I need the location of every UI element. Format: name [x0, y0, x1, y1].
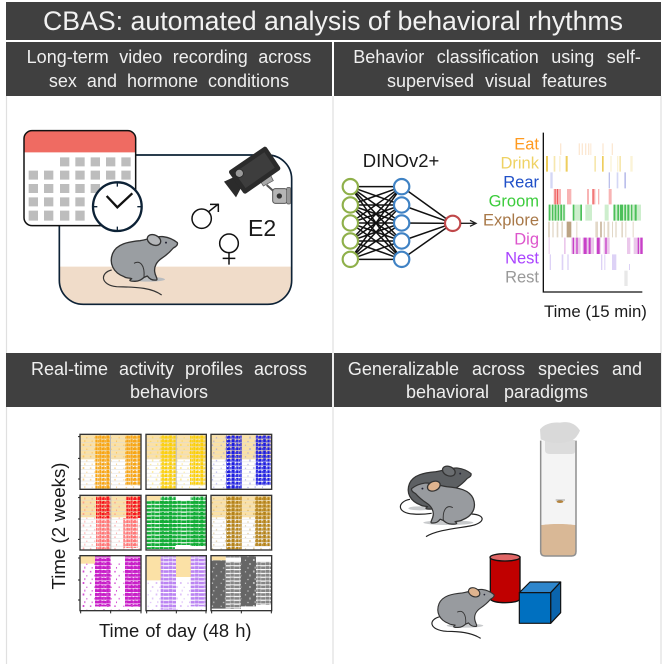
rest bars [550, 254, 630, 270]
heading: video recording: sex and hormone conditions [49, 71, 289, 91]
mouse with objects [432, 586, 494, 638]
cage with bedding [59, 155, 292, 304]
rear bars [550, 172, 626, 188]
actogram rest purple [146, 556, 206, 611]
heading: behavior classification: Behavior classification using self- [353, 47, 641, 67]
behavior labels: Explore [483, 212, 539, 230]
actogram eat [80, 434, 141, 489]
heading: behavior classification [334, 42, 661, 96]
fly [556, 500, 565, 503]
nest bars [549, 238, 643, 254]
clock [93, 182, 142, 231]
heading: activity profiles: behaviors [130, 382, 208, 402]
heading: activity profiles [6, 353, 332, 407]
behavior labels: Groom [489, 192, 539, 210]
heading: species and paradigms: behavioral paradigms [406, 382, 588, 402]
calendar [24, 131, 136, 226]
axes [543, 133, 642, 292]
two mice [400, 464, 482, 537]
y-axis label: Time (2 weeks) [48, 462, 69, 590]
icon: male symbol [192, 204, 218, 228]
dark mouse [408, 464, 471, 509]
behavior labels: Eat [514, 136, 539, 154]
heading: species and paradigms: Generalizable across species and [348, 359, 642, 379]
icon: female symbol [220, 234, 238, 265]
extra bars [624, 271, 628, 286]
behavior labels: Dig [514, 230, 539, 248]
panel: behavior classification [334, 42, 661, 321]
output node [445, 216, 460, 231]
actogram explore [146, 495, 206, 550]
ethogram chart [543, 133, 643, 292]
actogram groom [80, 495, 141, 550]
actogram grid [78, 434, 272, 613]
behavior labels: Rest [505, 268, 539, 286]
drink bars [546, 156, 633, 172]
axis ticks [78, 437, 271, 613]
hidden nodes [394, 179, 409, 267]
connections [350, 187, 453, 259]
gray mouse [412, 479, 474, 524]
label: DINOv2+: DINOv2+ [363, 150, 439, 171]
groom bars [554, 189, 612, 204]
behavior labels [483, 136, 540, 286]
heading: video recording: Long-term video recording across [27, 47, 311, 67]
actogram nest [80, 556, 141, 611]
arrow [461, 220, 476, 226]
eat bars [560, 143, 613, 155]
camera [224, 149, 291, 204]
title text: CBAS: automated analysis of behavioral rhythms [43, 6, 623, 36]
heading: video recording [6, 42, 332, 96]
label: E2: E2 [248, 215, 276, 241]
actogram drink [146, 434, 206, 489]
panel: video recording [6, 42, 332, 304]
fly vial [540, 422, 580, 556]
blue cube [519, 582, 561, 623]
heading: activity profiles: Real-time activity profiles across [31, 359, 307, 379]
x-axis label: Time of day (48 h) [99, 620, 252, 641]
input nodes [343, 179, 358, 267]
illustration: recording cage [24, 131, 292, 304]
heading: species and paradigms [334, 353, 661, 407]
red cylinder [490, 554, 520, 603]
panel: activity profiles [6, 353, 332, 641]
actogram rear [211, 434, 272, 489]
mouse [103, 233, 177, 295]
explore bars [549, 205, 641, 221]
illustrations [400, 422, 580, 638]
axis label: time 15 min: Time (15 min) [544, 302, 647, 321]
actogram dig [211, 495, 272, 550]
behavior labels: Drink [500, 154, 540, 172]
title bar [6, 2, 661, 40]
heading: behavior classification: supervised visual features [387, 71, 607, 91]
actogram rest gray [211, 556, 272, 611]
behavior labels: Nest [505, 250, 539, 268]
neural network [343, 179, 476, 267]
behavior labels: Rear [503, 174, 540, 192]
panel: species and paradigms [334, 353, 661, 638]
dig bars [548, 222, 634, 237]
